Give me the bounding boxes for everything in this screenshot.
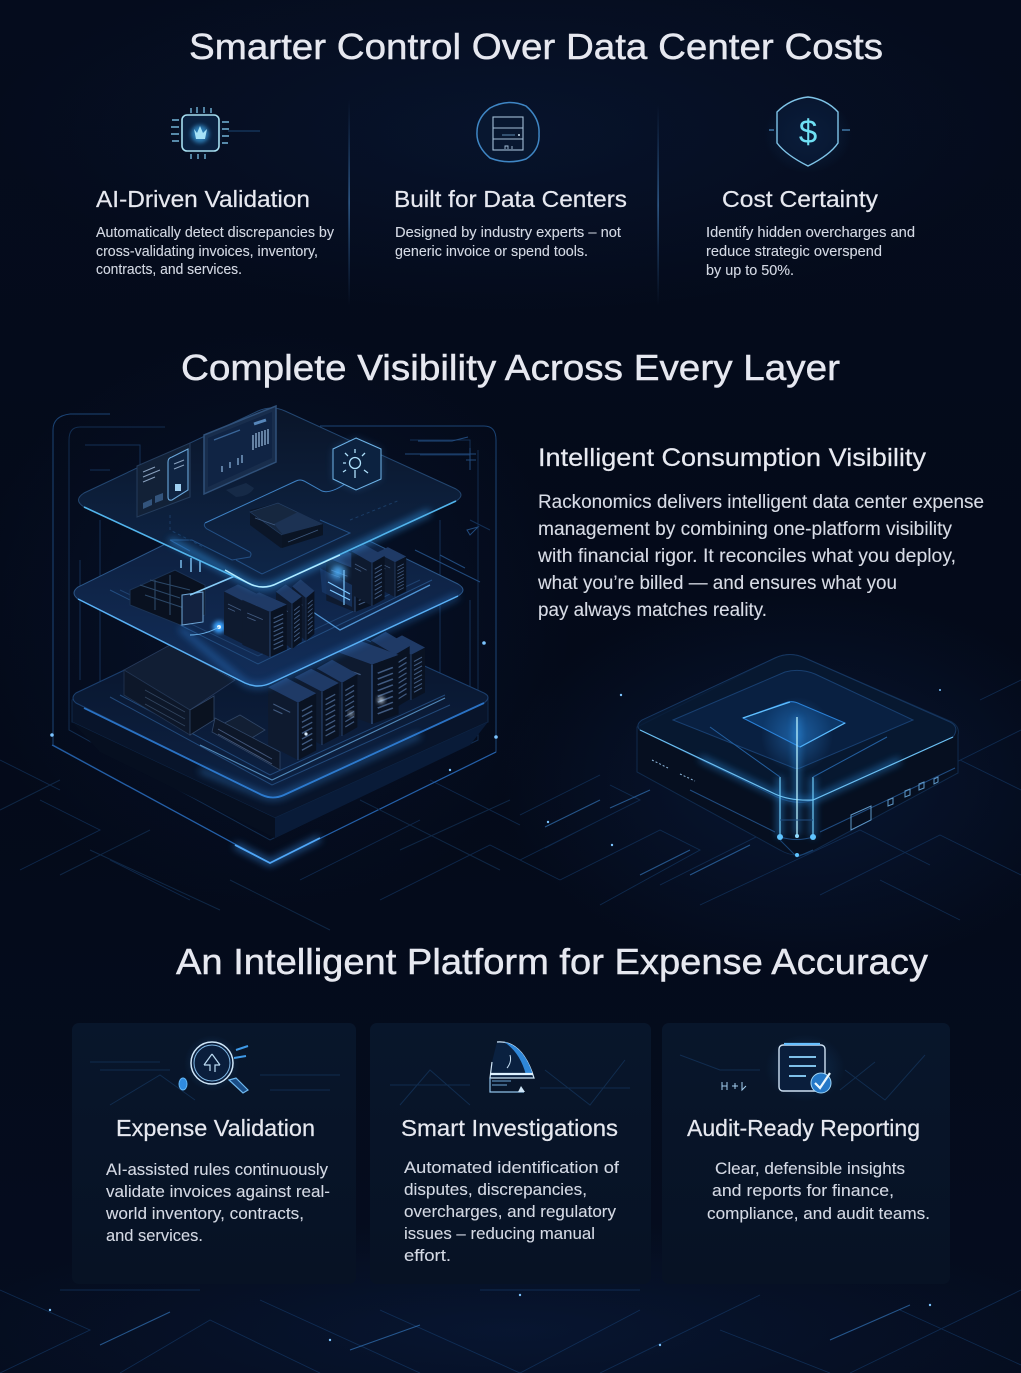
card decoration — [680, 1055, 925, 1100]
feature: Cost Certainty — [706, 97, 915, 279]
icon: server in circle — [477, 102, 539, 162]
paragraph: Rackonomics: pay always matches reality. — [538, 600, 767, 621]
description — [706, 225, 915, 279]
paragraph: Rackonomics: Rackonomics delivers intelligent data center expense — [538, 492, 984, 513]
description: AI-assisted rules continuously — [106, 1160, 328, 1179]
bottom layer — [72, 602, 488, 838]
title: intelligent platform: An Intelligent Platform for Expense Accuracy — [176, 941, 928, 982]
top layer: central box — [250, 503, 323, 548]
outer frame — [0, 414, 510, 930]
illustration: layered data center stack — [0, 406, 510, 930]
top layer: monitor — [204, 406, 276, 497]
description — [395, 225, 621, 260]
description: generic invoice or spend tools. — [395, 244, 588, 260]
heading: Expense Validation — [116, 1115, 315, 1141]
description: and services. — [106, 1226, 203, 1245]
middle layer: server racks — [224, 544, 406, 657]
card decoration — [90, 1062, 340, 1105]
description: by up to 50%. — [706, 263, 794, 279]
card: Expense Validation — [72, 1023, 356, 1284]
bottom layer: low equipment — [124, 645, 280, 770]
description: issues – reducing manual — [404, 1224, 595, 1243]
description: Automatically detect discrepancies by — [96, 225, 335, 241]
description: reduce strategic overspend — [706, 244, 882, 260]
description: Designed by industry experts – not — [395, 225, 621, 241]
description — [96, 225, 335, 278]
heading: Intelligent Consumption Visibility: Intelligent Consumption Visibility — [538, 444, 927, 472]
middle layer: left circuit equipment — [130, 558, 235, 635]
top layer: hexagon insight icon — [333, 438, 381, 490]
description — [707, 1159, 930, 1223]
paragraph: Rackonomics: management by combining one-platform visibility — [538, 519, 952, 540]
description: Automated identification of — [404, 1158, 619, 1177]
bottom layer: server racks — [268, 632, 425, 760]
feature: AI-Driven Validation — [96, 107, 335, 278]
card: Audit-Ready Reporting — [662, 1023, 950, 1284]
icon: dollar shield — [764, 97, 852, 173]
description: cross-validating invoices, inventory, — [96, 244, 318, 260]
icon: magnifier — [179, 1035, 248, 1093]
paragraph: Rackonomics: with financial rigor. It reconciles what you deploy, — [537, 546, 956, 567]
description: Clear, defensible insights — [715, 1159, 905, 1178]
description: effort. — [404, 1246, 451, 1265]
illustration: glowing platform device — [637, 654, 958, 857]
middle layer — [74, 498, 463, 686]
icon: report with check — [722, 1034, 845, 1102]
heading: Audit-Ready Reporting — [687, 1115, 920, 1141]
divider left — [348, 100, 350, 305]
description: contracts, and services. — [96, 262, 242, 278]
card: Smart Investigations — [370, 1023, 651, 1284]
description — [404, 1158, 619, 1265]
background circuit traces — [0, 680, 1021, 1373]
paragraph: Rackonomics — [537, 492, 984, 621]
device ports — [652, 760, 938, 830]
icon: dollar shield: $ — [799, 113, 817, 150]
description: and reports for finance, — [712, 1181, 894, 1200]
heading: Smart Investigations — [401, 1115, 618, 1141]
icon: AI chip — [171, 107, 260, 159]
frame right details — [405, 437, 480, 582]
description: validate invoices against real- — [106, 1182, 330, 1201]
top layer: tablet panel — [137, 443, 190, 517]
divider right — [658, 105, 659, 305]
description: Identify hidden overcharges and — [706, 225, 915, 241]
paragraph: Rackonomics: what you’re billed — and ensures what you — [537, 573, 897, 594]
heading: Built for Data Centers — [394, 186, 627, 212]
description: overcharges, and regulatory — [404, 1202, 616, 1221]
card decoration — [390, 1060, 630, 1105]
title: smarter control: Smarter Control Over Data Center Costs — [189, 26, 883, 67]
description: disputes, discrepancies, — [404, 1180, 587, 1199]
top layer — [78, 406, 461, 587]
heading: Cost Certainty — [722, 186, 879, 212]
description — [105, 1160, 330, 1245]
description: world inventory, contracts, — [105, 1204, 304, 1223]
device glowing edges — [640, 717, 955, 857]
title: complete visibility: Complete Visibility Across Every Layer — [181, 347, 840, 388]
description: compliance, and audit teams. — [707, 1204, 930, 1223]
heading: AI-Driven Validation — [96, 186, 310, 212]
feature: Built for Data Centers — [394, 102, 627, 260]
icon: document with arc — [490, 1042, 534, 1092]
